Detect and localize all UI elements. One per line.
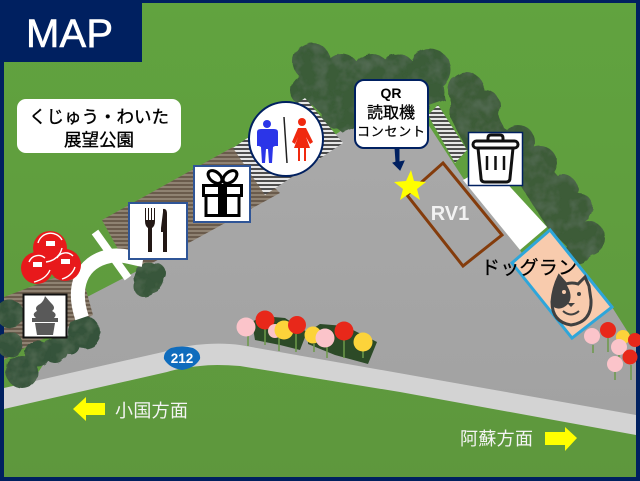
QR reader callout — [355, 80, 428, 148]
RV1 parking bay — [407, 163, 502, 266]
title block: MAP — [26, 12, 113, 56]
park name label — [17, 99, 181, 153]
road 212 — [4, 344, 636, 435]
icon: woman — [292, 118, 313, 161]
QR reader callout: コンセント — [357, 124, 425, 139]
wooden deck left — [4, 268, 93, 360]
divider line — [284, 117, 287, 163]
arrow: to Aso — [545, 427, 577, 451]
trees: lower left cluster — [0, 300, 100, 388]
wooden deck centre — [102, 147, 280, 268]
icon: restaurant panel — [129, 203, 187, 259]
hedge foliage — [252, 316, 307, 350]
arrow: to Oguni — [73, 397, 105, 421]
park name label: 展望公園 — [64, 130, 134, 150]
icon: gift panel — [194, 166, 250, 222]
QR reader callout: QR — [380, 85, 402, 101]
white entrance arrow — [78, 232, 143, 318]
icon: star — [394, 170, 426, 200]
RV1 parking bay: RV1 — [431, 203, 469, 225]
Oguni direction label: 小国方面 — [115, 401, 188, 421]
park name label: くじゅう・わいた — [29, 107, 169, 127]
trees: right cluster — [448, 72, 605, 265]
icon: camellia flowers — [21, 231, 81, 284]
icon: trash panel — [468, 132, 522, 186]
icon: man — [257, 120, 278, 163]
title block — [0, 0, 142, 62]
hatched deck right — [428, 105, 467, 163]
dog run area — [481, 230, 612, 338]
toilet deck — [233, 98, 343, 195]
icon: restroom circle — [249, 102, 323, 176]
dog run label: ドッグラン — [481, 257, 577, 279]
flowers right edge — [584, 322, 640, 380]
roses — [236, 310, 372, 352]
trees: small cluster by road — [134, 263, 166, 297]
parking lot — [4, 112, 636, 420]
trees: top cluster — [290, 43, 451, 133]
route 212 shield — [164, 346, 200, 370]
Aso direction label: 阿蘇方面 — [460, 429, 533, 449]
route 212 shield: 212 — [171, 351, 193, 366]
QR reader callout: 読取機 — [367, 104, 415, 122]
arrow: callout to star — [393, 148, 404, 170]
white walkway strip — [463, 165, 547, 250]
icon: dog face — [552, 276, 591, 325]
flower hedge — [236, 310, 377, 364]
stems — [248, 329, 363, 358]
icon: soft serve panel — [24, 294, 66, 338]
